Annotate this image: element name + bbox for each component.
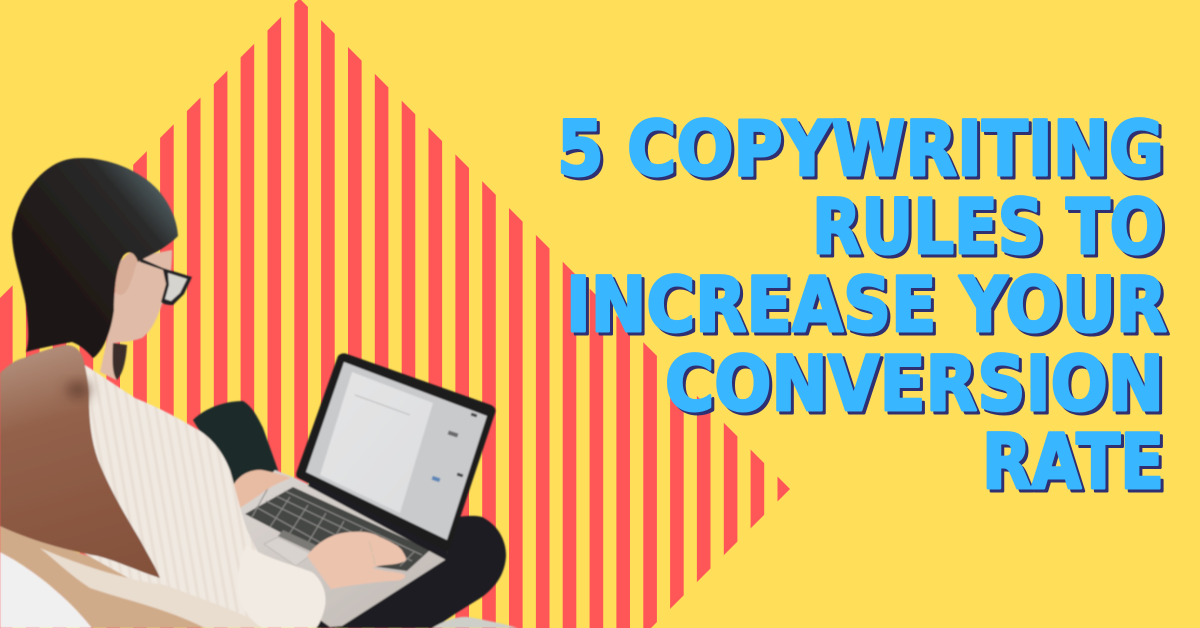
laptop screen (296, 353, 496, 560)
striped diamond background (0, 0, 791, 628)
rear knee (193, 401, 279, 484)
on-screen sidebar (432, 413, 477, 482)
tan blanket (0, 526, 215, 628)
white cushion (0, 552, 92, 628)
front leg (300, 516, 506, 628)
ear (115, 252, 138, 295)
pillow (0, 345, 160, 578)
seat cushion (432, 617, 518, 628)
title shadow (560, 107, 1170, 509)
glasses (140, 258, 192, 305)
hair (12, 158, 178, 380)
title (557, 104, 1167, 506)
title shadow: RATE (985, 420, 1167, 509)
left hand (234, 470, 291, 508)
keyboard (245, 481, 430, 571)
sweater hem (40, 548, 270, 628)
photo: woman with laptop (0, 158, 518, 628)
title: RATE (982, 417, 1164, 506)
neck and face (100, 250, 172, 380)
right hand (307, 532, 406, 589)
sweater (60, 365, 325, 628)
trackpad (264, 537, 312, 566)
laptop base (236, 470, 448, 627)
sleeve (238, 545, 326, 628)
